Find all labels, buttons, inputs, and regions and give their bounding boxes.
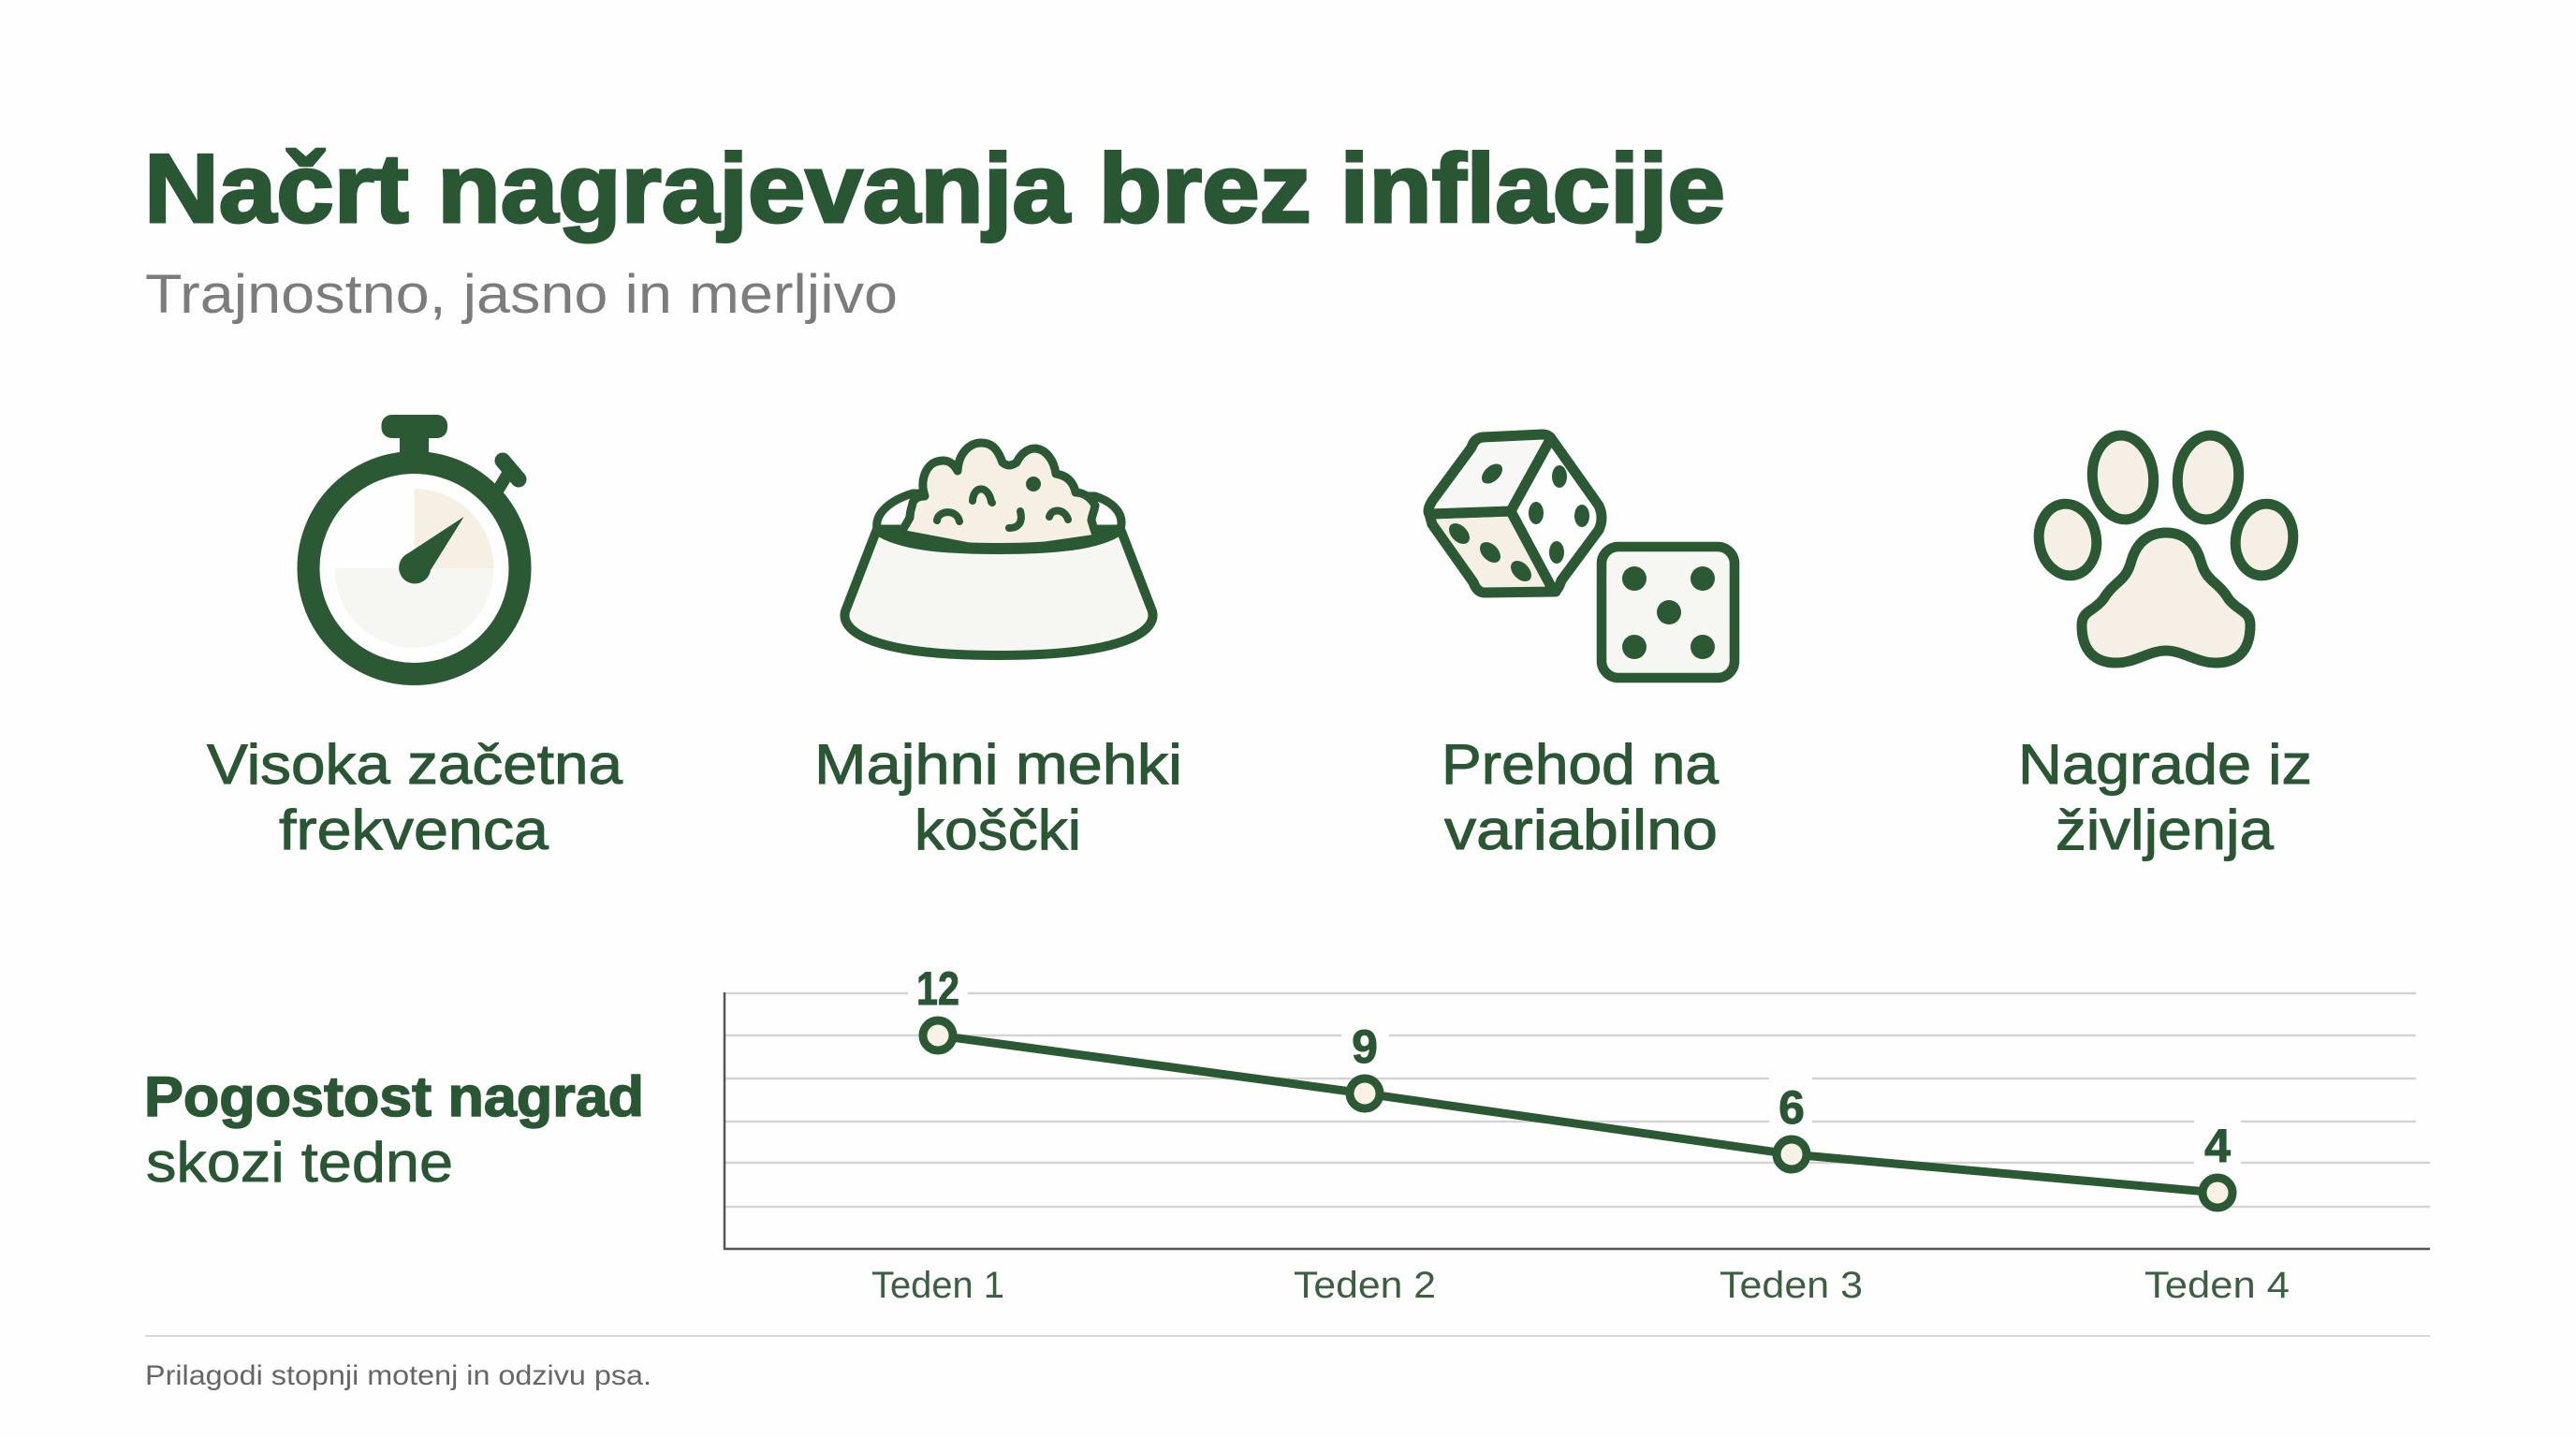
data line	[938, 1035, 2217, 1193]
data values: 6	[1778, 1081, 1805, 1134]
icon: food bowl	[844, 443, 1153, 655]
right die	[1602, 547, 1734, 678]
data values: 9	[1352, 1020, 1378, 1073]
week axis labels	[871, 1265, 2290, 1306]
label: high initial frequency: frekvenca	[279, 799, 549, 861]
icon: stopwatch	[309, 415, 520, 674]
title: Načrt nagrajevanja brez inflacije	[144, 135, 1725, 243]
label: switch to variable: variabilno	[1444, 799, 1718, 861]
label: switch to variable	[1442, 733, 1720, 861]
icon: paw	[2033, 433, 2299, 663]
week axis labels: Teden 3	[1720, 1265, 1863, 1306]
label: high initial frequency	[207, 733, 623, 861]
label: small soft pieces: Majhni mehki	[814, 733, 1182, 796]
label: life rewards: življenja	[2056, 799, 2275, 861]
label: high initial frequency: Visoka začetna	[207, 733, 623, 796]
chart heading: Pogostost nagrad	[144, 1065, 644, 1128]
label: switch to variable: Prehod na	[1442, 733, 1720, 796]
chart heading	[144, 1065, 644, 1194]
label: small soft pieces	[814, 733, 1182, 861]
chart heading: skozi tedne	[146, 1131, 453, 1194]
week axis labels: Teden 2	[1294, 1265, 1436, 1306]
data values	[916, 962, 2231, 1172]
footnote: Prilagodi stopnji motenj in odzivu psa.	[145, 1360, 651, 1391]
week axis labels: Teden 1	[871, 1265, 1004, 1306]
data points	[923, 1020, 2232, 1208]
icon: dice	[1428, 434, 1734, 678]
left die faces	[1428, 434, 1602, 593]
week axis labels: Teden 4	[2144, 1265, 2290, 1306]
data values: 12	[916, 962, 959, 1015]
label: life rewards: Nagrade iz	[2018, 733, 2312, 796]
data values: 4	[2204, 1120, 2231, 1172]
label: life rewards	[2018, 733, 2312, 861]
line chart	[724, 962, 2430, 1306]
subtitle: Trajnostno, jasno in merljivo	[145, 264, 898, 325]
label: small soft pieces: koščki	[915, 799, 1081, 861]
